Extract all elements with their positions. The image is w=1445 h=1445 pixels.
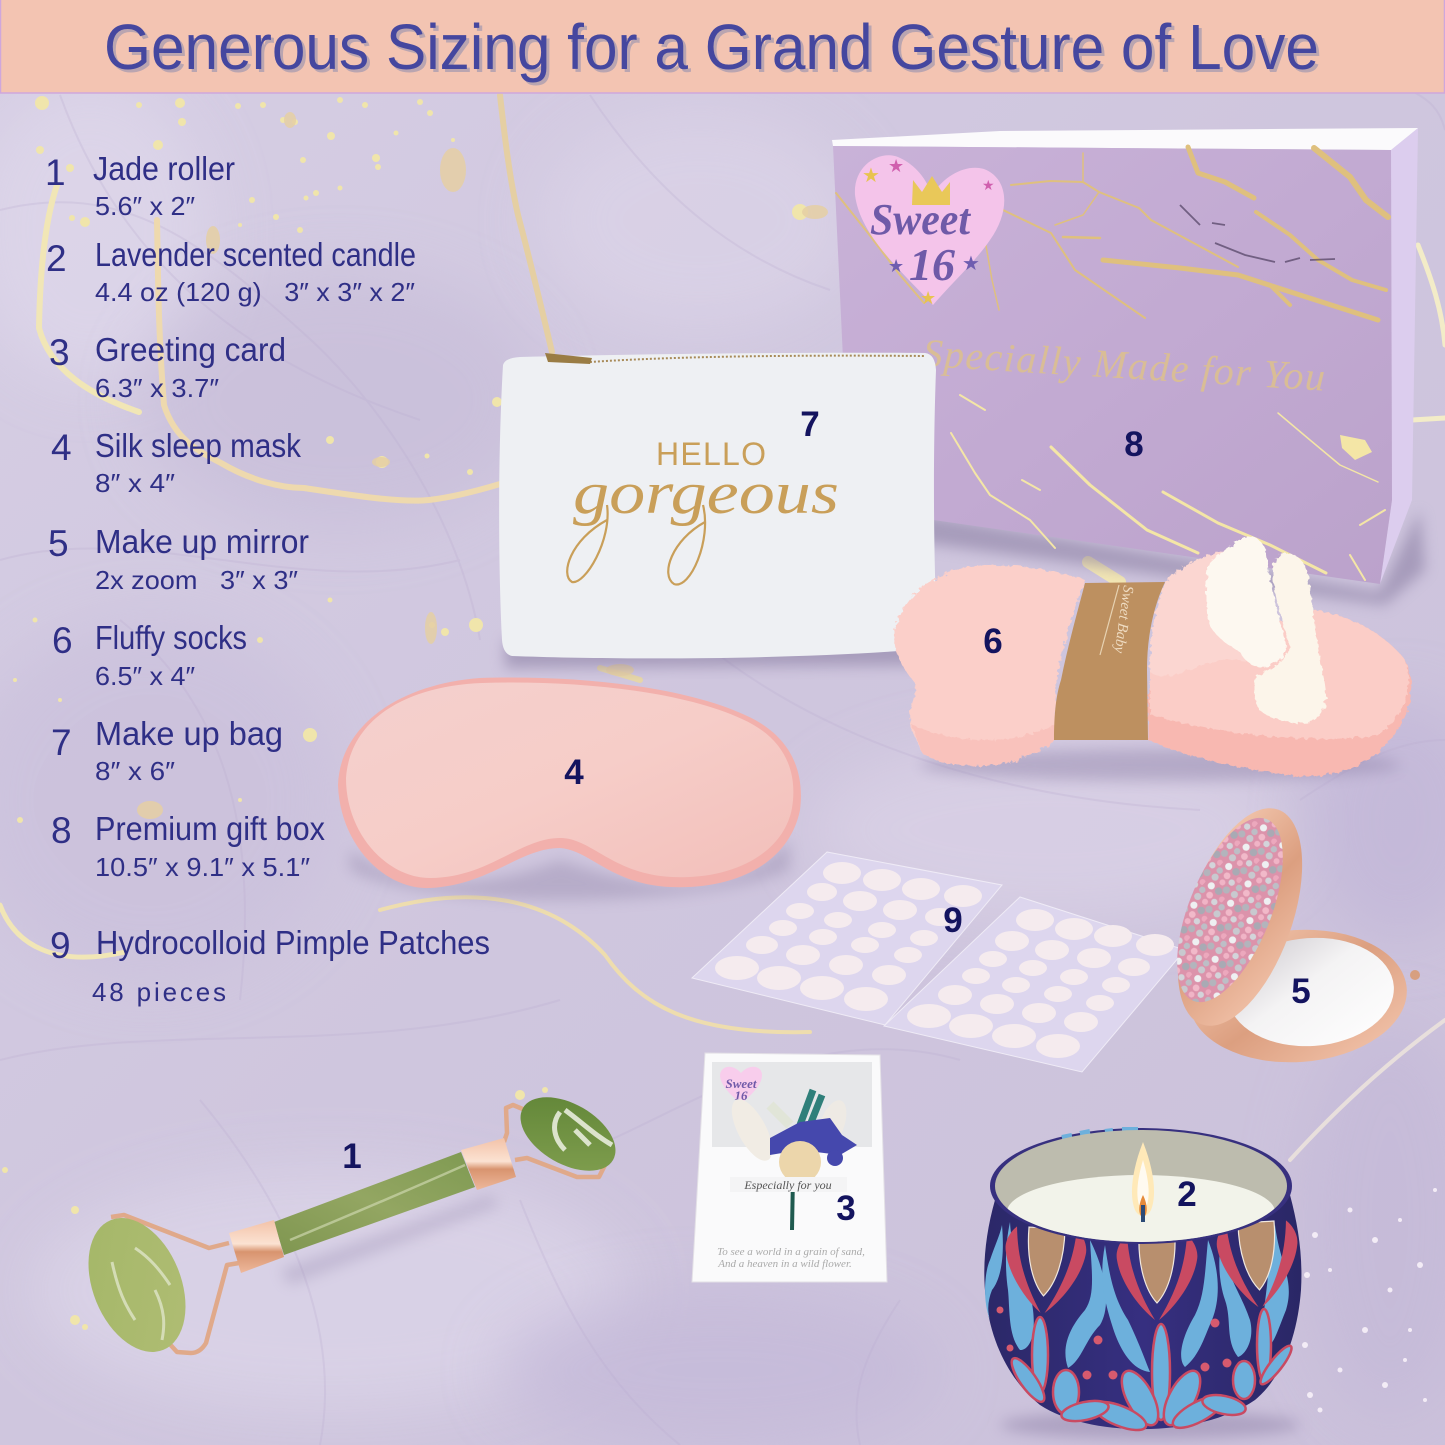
flame and wick: [1132, 1142, 1154, 1222]
box spine: [1380, 128, 1418, 584]
zipper pull: [545, 353, 592, 364]
card strip: [730, 1177, 847, 1192]
list item 6: Fluffy socks: [95, 619, 247, 656]
bag shadow: [505, 640, 940, 668]
small jade stone: [508, 1082, 628, 1186]
title banner: [0, 0, 1444, 93]
Sweet 16 heart badge: [855, 155, 1004, 308]
Sweet 16 heart badge: ★: [888, 156, 904, 176]
tin rim: [990, 1128, 1292, 1244]
number 1: 1: [342, 1137, 362, 1176]
bag body: [499, 353, 938, 658]
list item 1: 5.6″ x 2″: [95, 191, 195, 221]
rim colour ticks: [1062, 1130, 1138, 1138]
tin body: [984, 1195, 1301, 1429]
HELLO text: HELLO: [656, 436, 766, 472]
petal flowers: [1007, 1309, 1296, 1436]
list item 5: [48, 523, 309, 595]
list item 5: 2x zoom 3″ x 3″: [95, 565, 298, 595]
makeup bag (item 7): [499, 353, 940, 668]
item list: [45, 150, 490, 1007]
mask body: [346, 682, 793, 878]
number 2: 2: [1177, 1175, 1197, 1214]
list item 1: 1: [45, 152, 66, 193]
Sweet 16 heart badge: 16: [909, 239, 955, 290]
card poem: To see a world in a grain of sand,: [717, 1246, 865, 1258]
rose gold collars: [229, 1220, 284, 1273]
kraft paper band: [1054, 582, 1165, 740]
list item 9: Hydrocolloid Pimple Patches: [96, 924, 490, 961]
box lid top: [832, 128, 1418, 150]
list item 2: 4.4 oz (120 g) 3″ x 3″ x 2″: [95, 277, 415, 307]
sock cuff back: [1254, 553, 1326, 723]
card photo panel: [712, 1062, 872, 1147]
mask shadow: [350, 840, 790, 900]
list item 3: [49, 331, 286, 403]
pimple patches (item 9): [692, 852, 1185, 1072]
number 3: 3: [836, 1189, 856, 1228]
socks shadow: [920, 749, 1400, 781]
blue leaves: [985, 1222, 1289, 1372]
fluffy socks (item 6): [894, 537, 1411, 781]
list item 4: 4: [51, 427, 72, 468]
tulip motif left: [1002, 1226, 1087, 1315]
title text: Generous Sizing for a Grand Gesture of Love: [104, 11, 1319, 83]
mask piping: [338, 677, 801, 888]
left sock roll: [894, 565, 1085, 766]
list item 4: [51, 427, 301, 498]
candle shadow: [1000, 1411, 1300, 1439]
list item 4: Silk sleep mask: [95, 427, 301, 464]
Sweet 16 heart badge: Sweet: [870, 195, 972, 244]
list item 1: Jade roller: [93, 150, 235, 187]
roller frame: [111, 1105, 606, 1353]
list item 9: 48 pieces: [92, 977, 226, 1007]
sock cuff front: [1206, 537, 1287, 667]
list item 5: Make up mirror: [95, 523, 309, 560]
jewelled lid: [1155, 804, 1305, 1016]
number 8: 8: [1124, 425, 1144, 464]
list item 2: [46, 236, 416, 307]
jade roller (item 1): [70, 1082, 628, 1366]
list item 2: Lavender scented candle: [95, 236, 416, 273]
list item 3: Greeting card: [95, 331, 286, 368]
number 6: 6: [983, 622, 1003, 661]
jewelled lid rim: [1153, 792, 1327, 1042]
list item 1: [45, 150, 235, 221]
greeting card (item 3): And a heaven in a wild flower.: [717, 1258, 852, 1270]
gift box (item 8): [832, 128, 1425, 605]
right sock lower layer: [1148, 610, 1411, 776]
tulip motif centre: [1117, 1235, 1197, 1320]
mini Sweet 16 heart: [720, 1067, 762, 1104]
dried flower bouquet: [724, 1090, 857, 1230]
Sweet 16 heart badge: ★: [920, 288, 936, 308]
list item 3: 3: [49, 332, 70, 373]
gorgeous script: gorgeous: [573, 460, 839, 526]
list item 6: [52, 619, 247, 691]
list item 5: 5: [48, 523, 69, 564]
tin inner wall: [995, 1130, 1287, 1242]
gold spatter: [2, 96, 808, 1330]
mini Sweet 16 heart: Sweet: [725, 1076, 757, 1091]
script line on box: Specially Made for You: [921, 330, 1326, 400]
Sweet 16 heart badge: ★: [962, 253, 980, 275]
title shadow: Generous Sizing for a Grand Gesture of Love: [107, 14, 1322, 86]
gold marble veins: [836, 147, 1388, 320]
silk sleep mask (item 4): [338, 677, 801, 900]
list item 9: [50, 924, 490, 1007]
Sweet 16 heart badge: ★: [888, 256, 904, 276]
list item 7: 8″ x 6″: [95, 756, 175, 786]
list item 3: 6.3″ x 3.7″: [95, 373, 219, 403]
list item 6: 6.5″ x 4″: [95, 661, 195, 691]
jade handle: [274, 1152, 475, 1255]
Sweet 16 heart badge: ★: [862, 165, 880, 187]
list item 8: Premium gift box: [95, 810, 325, 847]
tulip motif right: [1216, 1220, 1301, 1309]
box front: [833, 146, 1392, 584]
list item 7: Make up bag: [95, 715, 283, 752]
number 5: 5: [1291, 972, 1311, 1011]
list item 9: 9: [50, 925, 71, 966]
compact mirror (item 5): [1153, 792, 1420, 1069]
mirror base: [1185, 923, 1411, 1069]
scented candle (item 2): [984, 1128, 1301, 1439]
list item 8: 10.5″ x 9.1″ x 5.1″: [95, 852, 310, 882]
card script line: Especially for you: [743, 1178, 832, 1192]
number 9: 9: [943, 901, 963, 940]
patch sheet left: [692, 852, 1002, 1025]
right sock upper fold: [1150, 550, 1262, 676]
large jade stone: [70, 1204, 204, 1366]
list item 6: 6: [52, 620, 73, 661]
gold veins: [0, 95, 1445, 1160]
number 4: 4: [564, 753, 584, 792]
number 7: 7: [800, 405, 820, 444]
mini Sweet 16 heart: 16: [734, 1088, 748, 1103]
list item 7: [51, 715, 283, 786]
mirror glass: [1224, 932, 1398, 1052]
list item 2: 2: [46, 238, 67, 279]
right sock middle layer: [1150, 610, 1409, 739]
sock fabric: [894, 537, 1411, 776]
wax surface: [1007, 1175, 1275, 1249]
list item 8: [51, 810, 325, 882]
box shadow: [900, 510, 1425, 605]
red dots: [996, 1306, 1232, 1380]
list item 8: 8: [51, 810, 72, 851]
white spatter: [1302, 1188, 1437, 1412]
roller shadow: [280, 1195, 500, 1285]
hinge knob: [1410, 970, 1420, 980]
patch sheet right: [884, 897, 1185, 1072]
list item 7: 7: [51, 722, 72, 763]
Sweet 16 heart badge: ★: [982, 177, 995, 193]
list item 4: 8″ x 4″: [95, 468, 175, 498]
band label: Sweet Baby: [1111, 584, 1136, 654]
greeting card (item 3): [692, 1053, 887, 1282]
card: [692, 1053, 887, 1282]
script descender loops: [567, 505, 705, 584]
